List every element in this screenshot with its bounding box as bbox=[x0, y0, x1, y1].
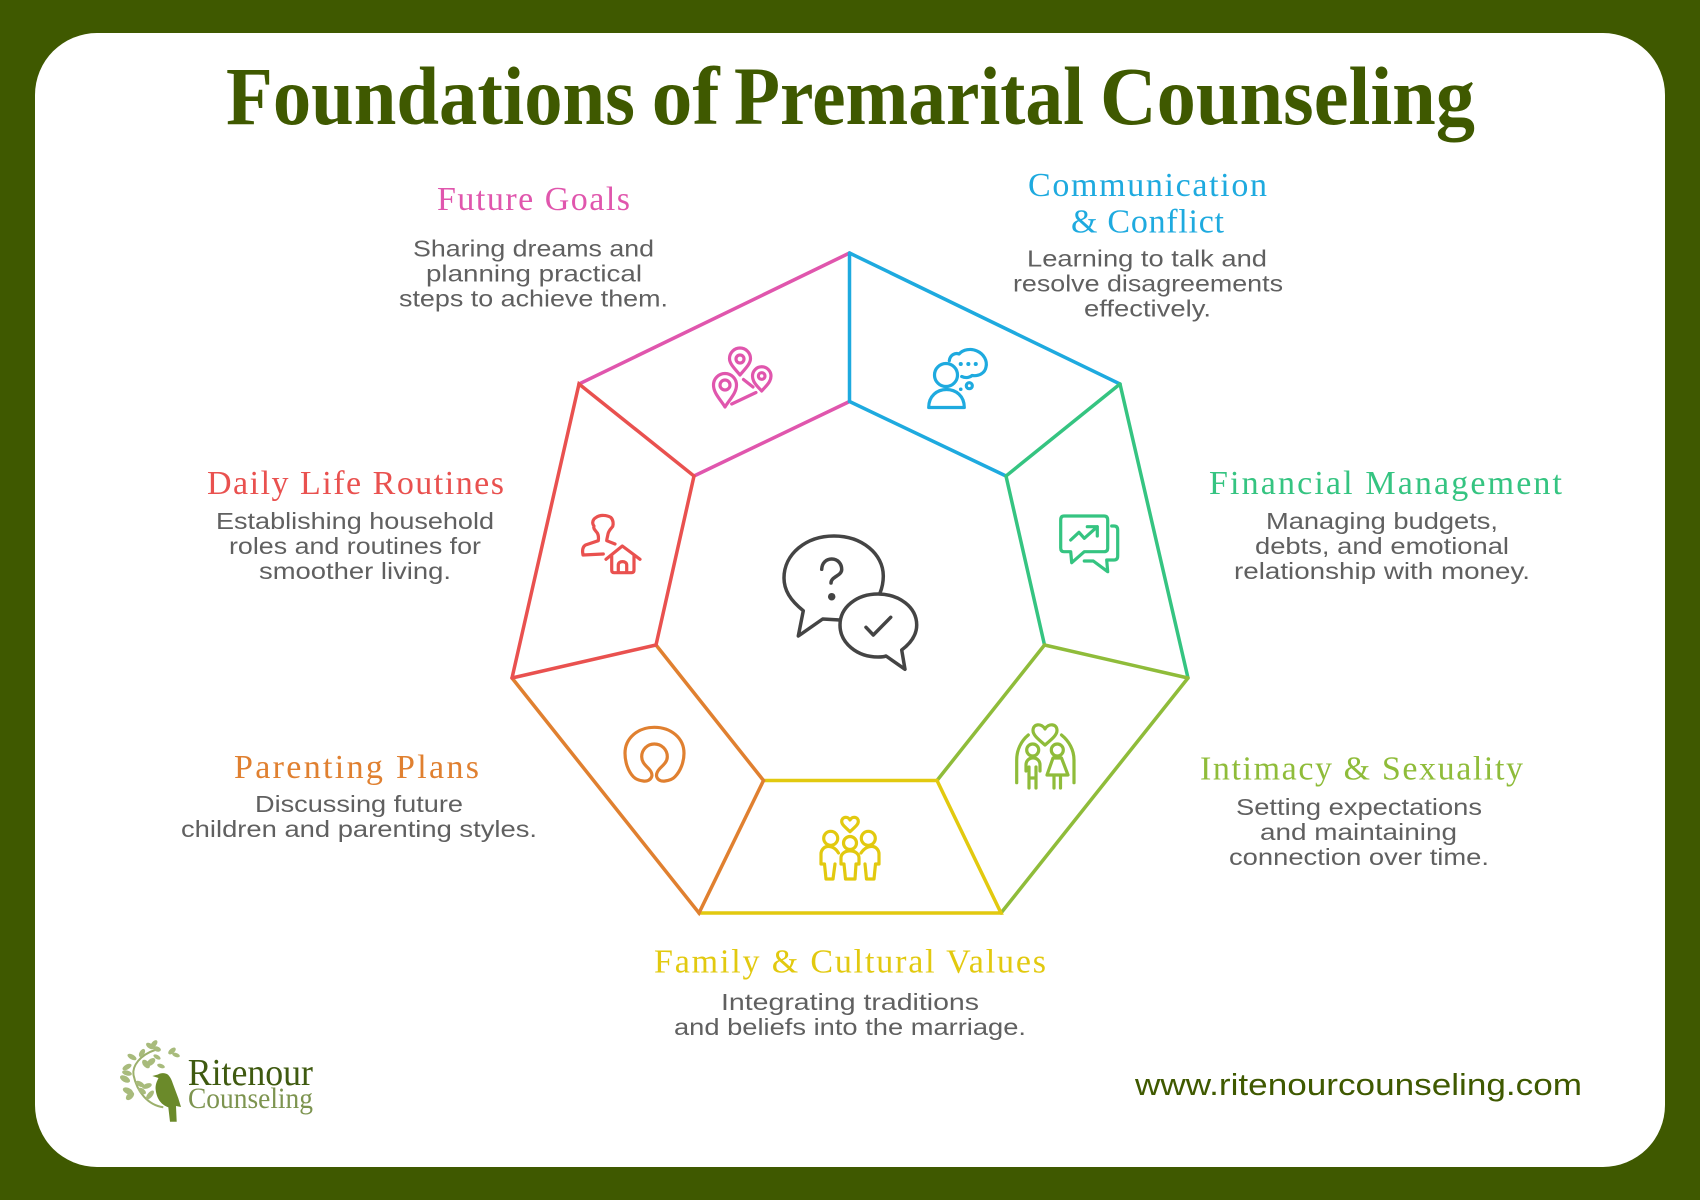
title: of bbox=[652, 50, 721, 142]
description: relationship with money. bbox=[1234, 558, 1530, 584]
title: Foundations bbox=[226, 50, 635, 142]
label: communication and conflict bbox=[1013, 167, 1283, 322]
description bbox=[1013, 246, 1283, 322]
heading: & Conflict bbox=[1071, 204, 1225, 241]
icon: map pins bbox=[714, 348, 771, 407]
segment: daily life routines bbox=[512, 384, 694, 678]
description: planning practical bbox=[426, 261, 642, 287]
label: financial management bbox=[1209, 465, 1563, 584]
question bubble bbox=[784, 536, 883, 636]
logo: Ritenour Counseling bbox=[119, 1039, 313, 1122]
description: steps to achieve them. bbox=[399, 286, 668, 312]
label: intimacy and sexuality bbox=[1200, 750, 1523, 870]
heptagon diagram bbox=[512, 253, 1188, 913]
description: and maintaining bbox=[1260, 819, 1457, 845]
segment: future goals bbox=[579, 253, 850, 476]
label: parenting plans bbox=[181, 749, 537, 842]
label: family and cultural values bbox=[654, 944, 1046, 1040]
description: children and parenting styles. bbox=[181, 816, 537, 842]
description: smoother living. bbox=[259, 558, 451, 584]
question mark bbox=[822, 559, 842, 583]
description: connection over time. bbox=[1229, 844, 1489, 870]
description bbox=[216, 508, 494, 584]
segment: financial management bbox=[1006, 384, 1188, 678]
heading: Communication bbox=[1028, 167, 1267, 204]
description: Sharing dreams and bbox=[413, 236, 654, 262]
heading: Intimacy & Sexuality bbox=[1200, 750, 1523, 788]
description: Integrating traditions bbox=[721, 989, 979, 1015]
description: and beliefs into the marriage. bbox=[674, 1014, 1026, 1040]
description: Learning to talk and bbox=[1027, 246, 1267, 272]
heading: Daily Life Routines bbox=[207, 465, 504, 502]
segment: family and cultural values bbox=[699, 780, 1001, 913]
icon: person with speech cloud bbox=[929, 349, 986, 408]
title: Premarital bbox=[734, 50, 1084, 142]
description bbox=[674, 989, 1026, 1040]
heading bbox=[1028, 167, 1267, 241]
icon: person and house bbox=[583, 515, 640, 573]
label: daily life routines bbox=[207, 465, 504, 584]
check bubble bbox=[840, 594, 917, 669]
icon: horseshoe shape bbox=[625, 727, 684, 781]
description bbox=[399, 236, 668, 312]
description bbox=[181, 791, 537, 842]
segment: communication and conflict bbox=[850, 253, 1120, 476]
description: roles and routines for bbox=[229, 533, 481, 559]
title: Counseling bbox=[1100, 50, 1475, 142]
title bbox=[226, 50, 1475, 142]
description: Managing budgets, bbox=[1266, 508, 1498, 534]
heading: Parenting Plans bbox=[234, 749, 479, 786]
heading: Future Goals bbox=[437, 181, 630, 218]
icon: question and check speech bubbles bbox=[784, 536, 917, 669]
logo wordmark: Ritenour bbox=[188, 1052, 313, 1094]
heading: Family & Cultural Values bbox=[654, 944, 1046, 980]
question dot bbox=[830, 595, 834, 599]
label: future goals bbox=[399, 181, 668, 312]
check mark bbox=[866, 617, 891, 635]
logo subtitle: Counseling bbox=[188, 1082, 313, 1115]
logo bird and branch bbox=[119, 1039, 181, 1122]
description: debts, and emotional bbox=[1255, 533, 1509, 559]
description bbox=[1229, 794, 1489, 870]
icon: couple under heart arch bbox=[1017, 725, 1074, 788]
description: effectively. bbox=[1084, 296, 1211, 322]
icon: trend chart in speech bubbles bbox=[1061, 516, 1118, 572]
segment: parenting plans bbox=[512, 645, 764, 913]
description: Discussing future bbox=[255, 791, 463, 817]
website url: www.ritenourcounseling.com bbox=[1134, 1067, 1582, 1102]
description: resolve disagreements bbox=[1013, 271, 1283, 297]
description bbox=[1234, 508, 1530, 584]
heading: Financial Management bbox=[1209, 465, 1563, 502]
segment: intimacy and sexuality bbox=[937, 645, 1188, 913]
icon: family with heart bbox=[821, 817, 879, 879]
description: Setting expectations bbox=[1236, 794, 1482, 820]
description: Establishing household bbox=[216, 508, 494, 534]
